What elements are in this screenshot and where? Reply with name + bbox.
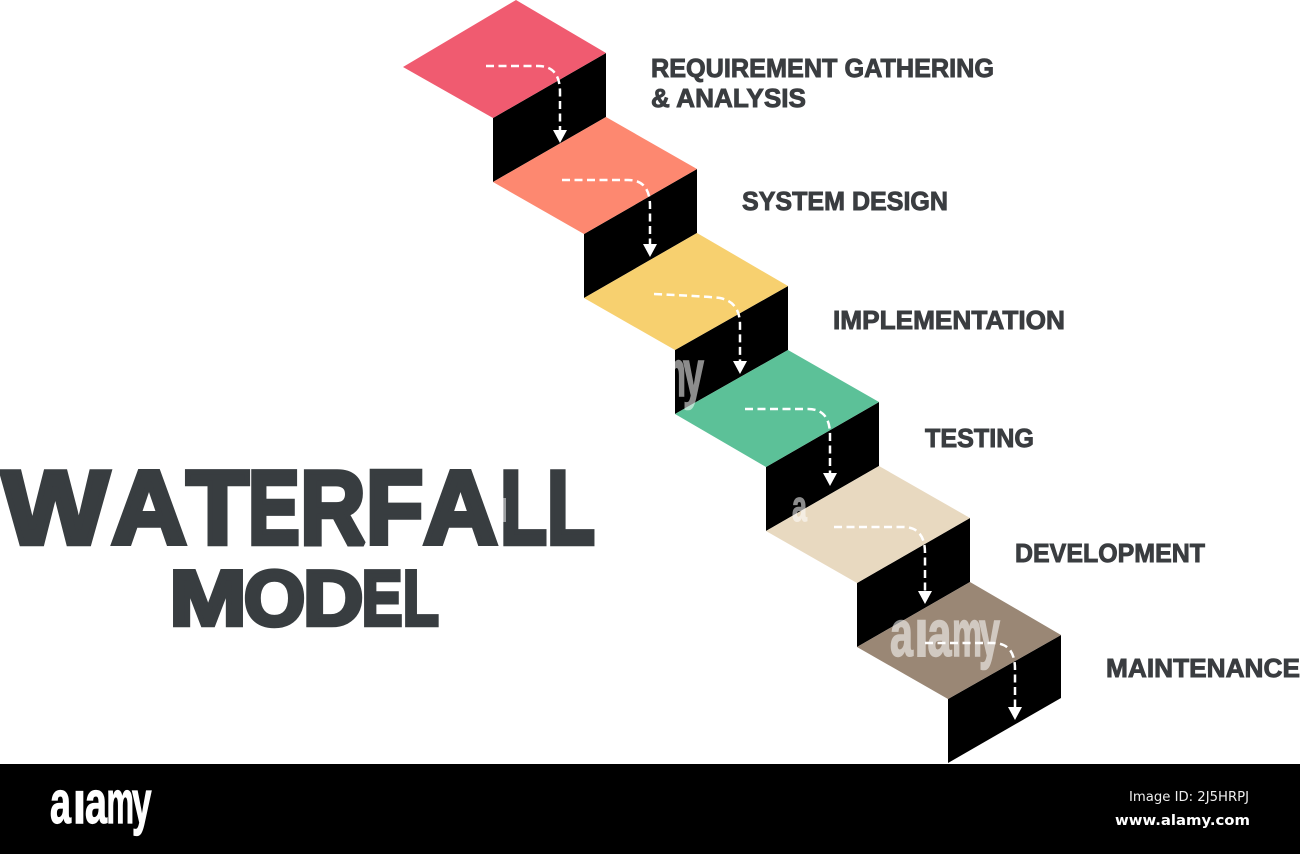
step 3: implementation	[584, 233, 788, 414]
label: system design: SYSTEM DESIGN	[742, 186, 948, 216]
footer bar	[0, 764, 1300, 854]
watermark: middle: m	[656, 336, 686, 410]
title: model: O	[244, 554, 305, 642]
title: waterfall: L	[547, 450, 595, 566]
title: waterfall: A	[424, 450, 498, 566]
watermark: small fragment on title	[501, 498, 506, 522]
title: model: D	[303, 554, 363, 642]
footer logo: y	[132, 769, 152, 836]
footer logo: l	[73, 784, 86, 833]
title: waterfall: F	[366, 450, 423, 566]
watermark: middle: y	[683, 336, 704, 410]
step 1: requirement gathering	[403, 0, 606, 182]
watermark: centre: a	[890, 596, 914, 670]
label: implementation: IMPLEMENTATION	[833, 305, 1065, 335]
step 4: testing	[675, 350, 879, 531]
watermark: middle: a	[632, 336, 656, 410]
staircase	[403, 0, 1061, 763]
watermark: centre: l	[914, 613, 928, 667]
watermark: small fragment on step 5: a	[792, 482, 807, 531]
footer logo: a	[85, 769, 107, 836]
title: waterfall: A	[112, 450, 186, 566]
title: model: L	[403, 554, 439, 642]
step 2: system design	[493, 117, 697, 298]
title: waterfall: R	[300, 450, 365, 566]
title: waterfall: T	[186, 450, 248, 566]
footer logo: m	[106, 769, 134, 836]
watermark: centre: y	[979, 596, 1000, 670]
step 5: development	[766, 466, 970, 647]
title: waterfall: L	[500, 450, 547, 566]
footer logo: a	[50, 769, 71, 836]
label: requirement gathering & analysis: REQUIREMENT GATHERING	[651, 53, 994, 83]
watermark: middle: l	[618, 353, 632, 407]
watermark: centre: a	[928, 596, 952, 670]
label: development: DEVELOPMENT	[1015, 538, 1205, 568]
step 6: maintenance	[857, 582, 1061, 763]
watermark: centre: m	[952, 596, 982, 670]
label: maintenance: MAINTENANCE	[1106, 653, 1300, 683]
title: waterfall: E	[248, 450, 300, 566]
title: waterfall: W	[2, 450, 110, 566]
title: model: M	[170, 554, 246, 642]
image id: Image ID: 2J5HRPJ	[1129, 790, 1249, 805]
label: analysis line: & ANALYSIS	[651, 83, 806, 113]
label: testing: TESTING	[925, 423, 1034, 453]
watermark: middle: a	[594, 336, 618, 410]
website: www.alamy.com	[1115, 813, 1250, 829]
title: model: E	[362, 554, 402, 642]
